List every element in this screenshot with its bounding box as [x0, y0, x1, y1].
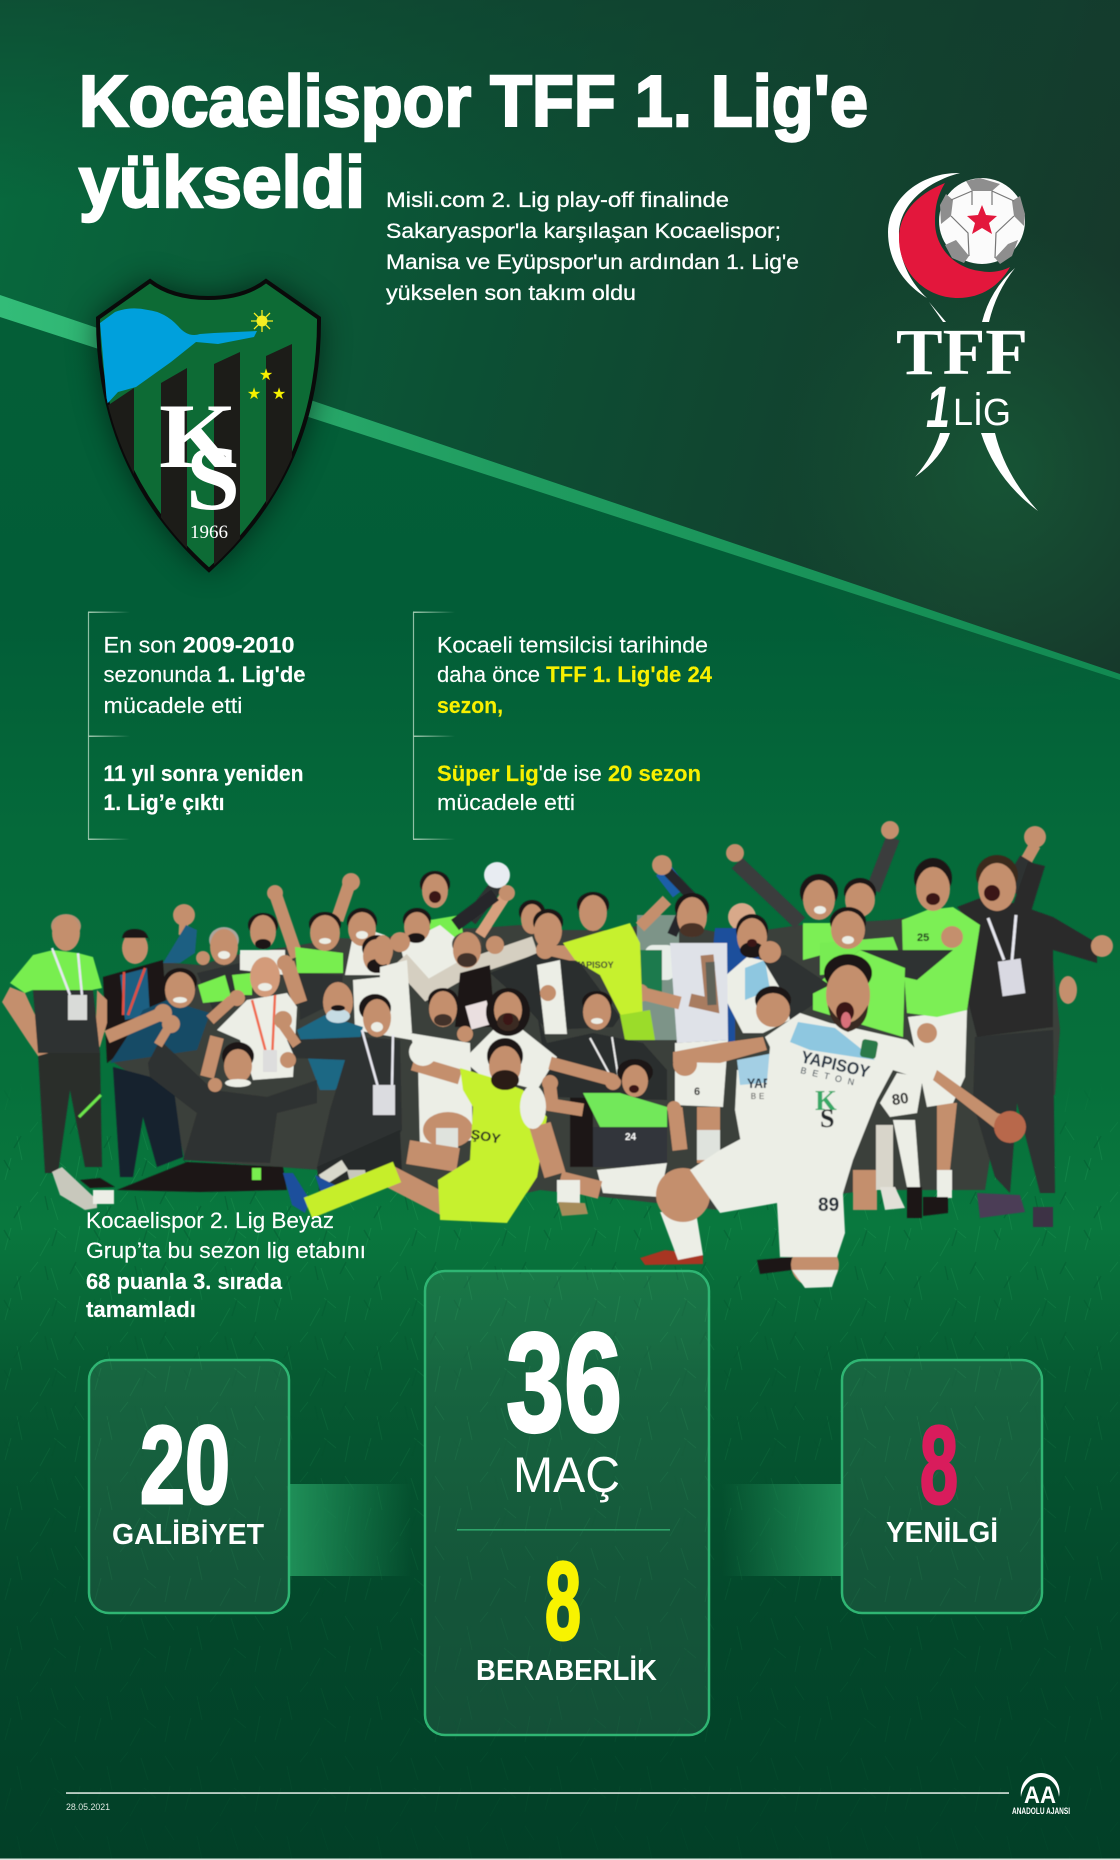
number 20: 20: [140, 1404, 230, 1527]
left man in neon and grey kit: [2, 914, 115, 1188]
label: YENİLGİ: [886, 1517, 998, 1549]
icon: TFF 1. Lig logo: [888, 173, 1038, 511]
seated man in dark jacket: [52, 1015, 317, 1210]
text: season summary: Grup’ta bu sezon lig etabını: [86, 1238, 366, 1263]
player with blue trim on right: [705, 903, 790, 1050]
yellow goalkeeper standing: [540, 892, 667, 1040]
text: TFF 1. Lig seasons: sezon,: [437, 693, 503, 718]
text: Süper Lig seasons: Süper Lig'de ise 20 sezon: [437, 761, 701, 786]
text: 11 years later: 1. Lig’e çıktı: [104, 790, 224, 815]
stars: [247, 367, 286, 403]
white-shirt bald man: [207, 955, 300, 1080]
connector: left: [289, 1484, 425, 1576]
main runner in white kit: K: [815, 1086, 837, 1117]
goalkeeper sitting in yellow: ŞOY: [470, 1126, 502, 1146]
seated player 24: [542, 1059, 681, 1216]
subtitle: yükselen son takım oldu: [386, 282, 636, 305]
stars: ★: [272, 386, 286, 403]
panel: wins: [89, 1360, 289, 1613]
team photo illustration: [2, 821, 1113, 1288]
label: GALİBİYET: [112, 1519, 264, 1551]
yellow goalkeeper standing: YAPISOY: [574, 960, 614, 970]
player with 80 shorts: 80: [891, 1090, 910, 1109]
main runner in white kit: 89: [818, 1195, 839, 1216]
player in dark jacket with white shirt: [490, 909, 620, 1034]
player partly hidden behind runner: YAPIS: [747, 1075, 783, 1091]
panel: right info box: [413, 612, 713, 840]
man with cap in black vest: [103, 925, 197, 1177]
player in green vest with arms up: [759, 907, 963, 1037]
player 25 in green vest: [902, 858, 980, 1216]
text: last season: sezonunda 1. Lig'de: [104, 662, 306, 687]
text: Süper Lig seasons: [437, 761, 701, 815]
main runner in white kit: S: [820, 1104, 834, 1133]
KS monogram: K: [159, 385, 237, 487]
label MAÇ: MAÇ: [513, 1447, 620, 1503]
players behind on right: [745, 874, 905, 1020]
text: TFF 1. Lig seasons: daha önce TFF 1. Lig'de 24: [437, 662, 713, 687]
title: yükseldi: [79, 143, 365, 223]
group silhouette base: [110, 905, 1060, 1210]
white-kit player sitting left of centre: [373, 935, 473, 1160]
footer rule: [66, 1792, 1009, 1794]
connector: right: [709, 1484, 842, 1576]
sun: [251, 310, 273, 332]
text: 11 years later: 11 yıl sonra yeniden: [104, 761, 304, 786]
icon: Anadolu Ajansı logo: [1012, 1773, 1070, 1816]
players behind white-shirt man: [240, 912, 343, 1020]
KS monogram: S: [186, 427, 240, 529]
stars: ★: [259, 367, 273, 384]
panel: left info box: [88, 612, 306, 840]
player partly hidden behind runner: [735, 986, 795, 1165]
text: season summary: [86, 1208, 366, 1322]
title: Kocaelispor TFF 1. Lig'e: [79, 62, 868, 142]
stars: ★: [247, 386, 261, 403]
label: BERABERLİK: [476, 1655, 657, 1687]
title: [79, 62, 868, 223]
text: last season: [104, 632, 306, 718]
panel: matches and draws: [425, 1271, 709, 1735]
back row raised arms: [173, 821, 1046, 957]
date: 28.05.2021: [66, 1802, 110, 1813]
bald man with mask: [297, 982, 363, 1090]
subtitle: Misli.com 2. Lig play-off finalinde: [386, 189, 729, 212]
main runner in white kit: [640, 954, 1026, 1288]
football: [939, 178, 1025, 264]
number 8 losses: 8: [920, 1404, 958, 1527]
player with 80 shorts: [853, 1073, 923, 1218]
text: TFF 1. Lig seasons: Kocaeli temsilcisi tarihinde: [437, 632, 708, 658]
player 25 in green vest: 25: [917, 932, 929, 944]
text: TFF 1. Lig seasons: [437, 632, 713, 718]
text: last season: En son 2009-2010: [104, 632, 294, 658]
young man in teal jacket: [107, 968, 245, 1063]
1. LİG wordmark: LİG: [953, 391, 1011, 434]
icon: Anadolu Ajansı logo: AA: [1024, 1782, 1056, 1809]
text: Süper Lig seasons: mücadele etti: [437, 790, 575, 815]
back row middle players: [345, 871, 545, 1040]
subtitle: Manisa ve Eyüpspor'un ardından 1. Lig'e: [386, 251, 799, 274]
player partly hidden behind runner: BET: [751, 1092, 775, 1101]
goal net behind: [637, 915, 679, 1040]
TFF wordmark: TFF: [896, 316, 1028, 389]
young man in dark jacket: [537, 991, 667, 1167]
1. LİG wordmark: 1: [926, 375, 950, 440]
text: season summary: 68 puanla 3. sırada: [86, 1269, 283, 1294]
coach in black tracksuit: [957, 855, 1113, 1227]
panel: losses: [842, 1360, 1042, 1613]
1966: 1966: [190, 522, 228, 543]
older man with phone: [196, 927, 253, 1010]
goalkeeper sitting in yellow: [308, 1038, 555, 1223]
text: season summary: tamamladı: [86, 1297, 196, 1322]
1. LİG wordmark: [926, 375, 1011, 440]
text: last season: mücadele etti: [104, 693, 242, 718]
number 36: 36: [506, 1303, 622, 1461]
subtitle: [386, 189, 799, 305]
KS monogram: [159, 385, 240, 529]
icon: Anadolu Ajansı logo: ANADOLU AJANSI: [1012, 1806, 1070, 1816]
main runner in white kit: YAPISOY: [799, 1047, 872, 1082]
text: 11 years later: [104, 761, 304, 815]
long-haired player: [463, 988, 621, 1090]
icon: Kocaelispor shield: [98, 281, 319, 580]
kneeling man with lanyard: [274, 994, 402, 1213]
text: season summary: Kocaelispor 2. Lig Beyaz: [86, 1208, 334, 1233]
main runner in white kit: BETON: [800, 1065, 861, 1089]
number 8 draws: 8: [545, 1540, 581, 1663]
tattooed player in white tank top: [631, 893, 728, 1163]
seated player 24: 24: [625, 1132, 637, 1143]
tattooed player in white tank top: 6: [694, 1086, 700, 1098]
subtitle: Sakaryaspor'la karşılaşan Kocaelispor;: [386, 220, 781, 243]
